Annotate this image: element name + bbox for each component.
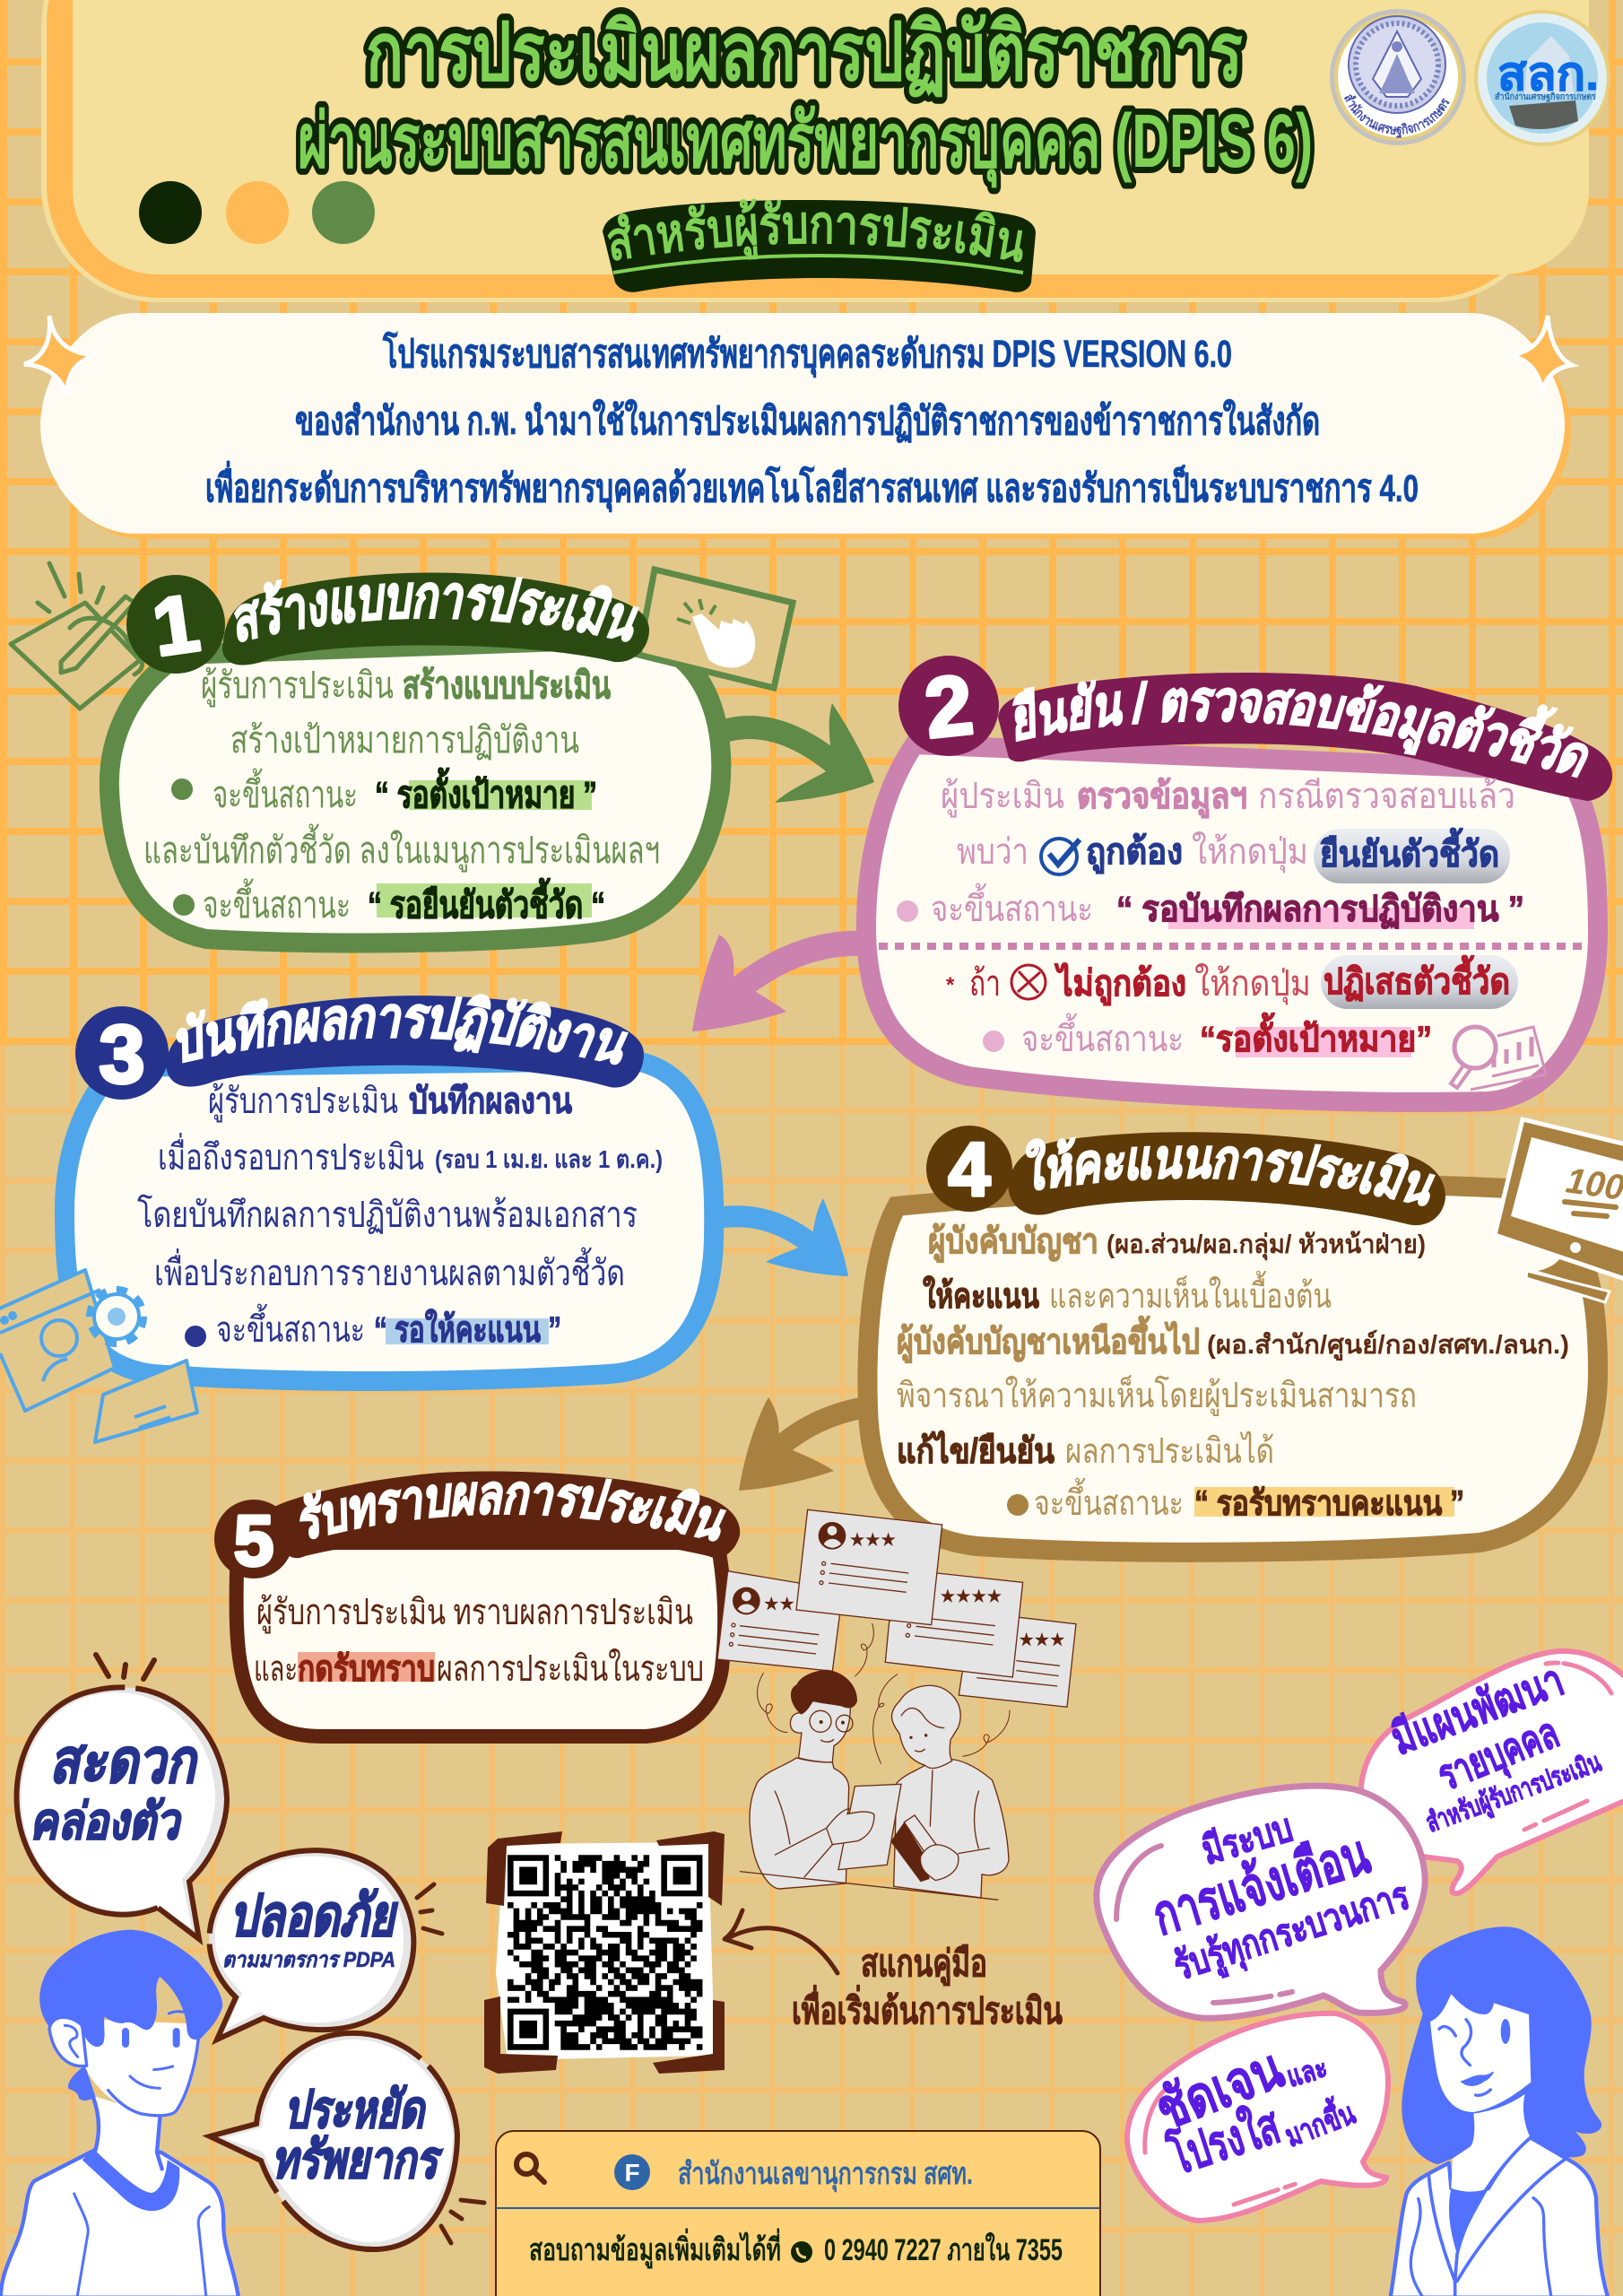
step 2 body text: incorrect branch — [946, 955, 1518, 1059]
contact prompt: สอบถามข้อมูลเพิ่มเติมได้ที่ — [529, 2228, 781, 2269]
icon: monitor with score 100 — [1495, 1119, 1623, 1302]
speech bubble: save resources — [210, 2033, 457, 2249]
panel: step 4 give score — [857, 1117, 1623, 1562]
speech bubble: clear and transparent: มากขึ้น — [1279, 2091, 1360, 2153]
step 5 title banner: 5 — [234, 1500, 273, 1580]
panel: step 2 verify indicator data — [856, 656, 1612, 1112]
card: three stars, far right: ★★★ — [1019, 1631, 1065, 1648]
step 4 body text: (ผอ.สำนัก/ศูนย์/กอง/สศท./ลนก.) — [1207, 1329, 1569, 1361]
step 5 body text — [254, 1593, 704, 1689]
speech bubble: convenient: คล่องตัว — [30, 1793, 182, 1849]
step 1 title banner: 1 — [148, 578, 204, 674]
card: four stars — [885, 1573, 1023, 1677]
step 2 body text: correct branch: ผู้ประเมิน — [941, 777, 1064, 817]
step 1 title banner: สร้างแบบการประเมิน — [234, 577, 639, 642]
person: man with glasses — [750, 1670, 857, 1889]
speech bubble: save resources: ประหยัด — [284, 2081, 426, 2139]
step 3 body text: ผู้รับการประเมิน — [208, 1082, 398, 1122]
QR caption: สแกนคู่มือ — [861, 1943, 987, 1987]
logo: office secretary building — [1474, 10, 1610, 146]
step 2 body text: incorrect branch: * — [946, 973, 955, 997]
icon: facebook: F — [624, 2159, 640, 2187]
step 3 body text: (รอบ 1 เม.ย. และ 1 ต.ค.) — [435, 1145, 663, 1173]
step 4 body text: แก้ไข/ยืนยัน — [897, 1431, 1055, 1471]
step 2 body text: incorrect branch: จะขึ้นสถานะ — [1021, 1013, 1184, 1059]
speech bubble: convenient: สะดวก — [49, 1727, 198, 1796]
icon: windows and gear — [0, 1270, 197, 1442]
card: two stars — [717, 1571, 843, 1671]
step 2 title banner: 2 — [921, 657, 977, 755]
speech bubble: notification system: การแจ้งเตือน — [1146, 1823, 1376, 1947]
panel: step 5 acknowledge result — [214, 1471, 741, 1744]
step 3 body text — [137, 1082, 663, 1350]
document held by man — [838, 1784, 901, 1870]
hand holding book — [920, 1845, 959, 1881]
step 2 body text: correct branch: จะขึ้นสถานะ — [931, 883, 1093, 929]
speech bubble: safe — [209, 1850, 413, 2039]
step 1 title banner — [126, 572, 649, 674]
step 3 body text: จะขึ้นสถานะ — [216, 1303, 365, 1350]
speech bubble: individual development plan: รายบุคคล — [1431, 1709, 1567, 1803]
step 2 body text: incorrect branch: ให้กดปุ่ม — [1194, 962, 1311, 1005]
step 2 body text: correct branch: พบว่า — [957, 832, 1028, 872]
QR caption: เพื่อเริ่มต้นการประเมิน — [792, 1985, 1063, 2031]
step 2 body text: correct branch: ถูกต้อง — [1086, 832, 1183, 874]
icon: magnifier over chart — [1451, 1027, 1546, 1090]
step 4 body text — [897, 1222, 1569, 1523]
button: reject indicator: ปฏิเสธตัวชี้วัด — [1324, 955, 1510, 1002]
step 3 body text: เมื่อถึงรอบการประเมิน — [158, 1133, 424, 1178]
intro text — [205, 330, 1419, 513]
step 3 body text: บันทึกผลงาน — [409, 1082, 572, 1121]
logo: office secretary building: สลก. — [1497, 48, 1599, 100]
QR caption — [792, 1943, 1063, 2031]
step 2 body text: correct branch — [897, 777, 1524, 929]
step 1 body text: จะขึ้นสถานะ — [213, 768, 358, 815]
step 1 body text: สร้างแบบประเมิน — [403, 665, 611, 706]
sparks: convenient bubble — [96, 1655, 154, 1679]
speech bubble: convenient — [17, 1687, 227, 1939]
step 2 body text: incorrect branch: ถ้า — [969, 964, 1001, 1004]
step 5 title banner: รับทราบผลการประเมิน — [299, 1478, 726, 1542]
icon: phone — [791, 2241, 812, 2263]
step 4 body text: (ผอ.ส่วน/ผอ.กลุ่ม/ หัวหน้าฝ่าย) — [1107, 1231, 1426, 1260]
title line 1: การประเมินผลการปฏิบัติราชการ — [366, 8, 1243, 98]
logo: office secretary building: สำนักงานเศรษฐกิจการเกษตร — [1495, 91, 1597, 102]
step 2 body text: incorrect branch: “รอตั้งเป้าหมาย” — [1200, 1013, 1432, 1059]
button: confirm indicator — [1314, 828, 1510, 883]
icon: search — [516, 2154, 544, 2182]
step 4 body text: จะขึ้นสถานะ — [1034, 1477, 1184, 1523]
arrow: pointing to QR code — [725, 1910, 838, 1973]
step 2 title banner: ยืนยัน / ตรวจสอบข้อมูลตัวชี้วัด — [1011, 680, 1589, 778]
icon: left sparkle — [24, 316, 97, 395]
icon: facebook — [614, 2154, 650, 2190]
speech bubble: individual development plan — [1361, 1651, 1623, 1893]
speech bubble: clear and transparent: โปรงใส — [1161, 2096, 1287, 2186]
step 1 body text — [143, 665, 660, 926]
logo: agricultural economics office seal — [1330, 9, 1466, 145]
speech bubble: notification system — [1097, 1786, 1425, 2018]
speech bubble: individual development plan: มีแผนพัฒนา — [1384, 1655, 1570, 1764]
card: three stars, front: ★★★ — [849, 1530, 896, 1548]
card: four stars: ★★★★ — [940, 1587, 1002, 1605]
step 3 title banner — [75, 994, 644, 1100]
step 5 title banner — [214, 1471, 741, 1580]
facebook page name: สำนักงานเลขานุการกรม สศท. — [678, 2157, 973, 2193]
icon: right sparkle — [1511, 316, 1572, 391]
arrow: step 4 to step 5 — [739, 1397, 861, 1491]
button: confirm indicator: ยืนยันตัวชี้วัด — [1320, 828, 1499, 874]
step 4 body text: ผู้บังคับบัญชา — [928, 1222, 1098, 1263]
icon: tablet with pointer hand — [638, 570, 793, 688]
icon: cross mark — [1011, 965, 1046, 999]
step 2 body text: correct branch: “ รอบันทึกผลการปฏิบัติงาน ” — [1116, 890, 1524, 929]
step 4 body text: ผลการประเมินได้ — [1065, 1431, 1274, 1471]
step 3 title banner: 3 — [99, 1009, 145, 1100]
icon: hand writing on paper — [11, 563, 143, 709]
speech bubble: safe: ตามมาตรการ PDPA — [222, 1948, 395, 1972]
step 3 body text: เพื่อประกอบการรายงานผลตามตัวชี้วัด — [154, 1247, 625, 1293]
step 2 body text: correct branch: ให้กดปุ่ม — [1192, 831, 1308, 874]
step 5 body text: และ — [254, 1649, 298, 1689]
logo: agricultural economics office seal: สำนักงานเศรษฐกิจการเกษตร — [1344, 94, 1449, 138]
book — [890, 1815, 936, 1882]
step 1 body text: สร้างเป้าหมายการปฏิบัติงาน — [230, 719, 579, 761]
step 3 body text: “ รอให้คะแนน ” — [374, 1309, 561, 1350]
decorative squiggles — [758, 1623, 1010, 1764]
panel: introduction — [40, 313, 1571, 539]
speech bubble: safe: ปลอดภัย — [230, 1883, 398, 1948]
button: reject indicator — [1321, 955, 1518, 1009]
phone number: 0 2940 7227 ภายใน 7355 — [824, 2231, 1063, 2267]
panel: step 1 create assessment form — [9, 561, 796, 952]
card: three stars, far right — [959, 1617, 1076, 1707]
step 4 title banner: 4 — [949, 1127, 991, 1212]
QR code with corner brackets — [484, 1831, 725, 2074]
illustration: woman — [1391, 1926, 1608, 2296]
step 1 body text: จะขึ้นสถานะ — [203, 878, 351, 926]
step 2 body text: incorrect branch: ไม่ถูกต้อง — [1054, 962, 1186, 1005]
speech bubble: clear and transparent: และ — [1283, 2051, 1331, 2093]
sparks: safe bubble — [417, 1884, 442, 1934]
step 4 title banner: ให้คะแนนการประเมิน — [1026, 1137, 1436, 1206]
hand holding document — [827, 1809, 874, 1845]
panel: contact box — [496, 2131, 1100, 2296]
step 2 body text: correct branch: กรณีตรวจสอบแล้ว — [1258, 777, 1515, 816]
step 1 body text: “ รอยืนยันตัวชี้วัด “ — [368, 878, 605, 926]
arrow: step 2 to step 3 — [692, 935, 861, 1031]
speech bubble: clear and transparent: ชัดเจน — [1148, 2038, 1291, 2142]
card: two stars: ★★ — [764, 1595, 794, 1613]
panel: step 3 record performance — [0, 994, 725, 1444]
panel: header banner — [41, 0, 1589, 302]
step 2 body text: correct branch: ตรวจข้อมูลฯ — [1077, 777, 1247, 818]
step 4 body text: ให้คะแนน — [923, 1275, 1039, 1316]
step 1 body text: ผู้รับการประเมิน — [201, 665, 394, 708]
subtitle badge: สำหรับผู้รับการประเมิน — [608, 199, 1022, 262]
card: three stars, front — [796, 1509, 942, 1625]
step 4 body text: ผู้บังคับบัญชาเหนือขึ้นไป — [897, 1316, 1200, 1363]
icon: check mark — [1041, 839, 1080, 874]
step 1 body text: “ รอตั้งเป้าหมาย ” — [375, 768, 597, 815]
step 3 title banner: บันทึกผลการปฏิบัติงาน — [176, 994, 629, 1065]
arrow: step 1 to step 2 — [725, 703, 874, 803]
speech bubble: clear and transparent — [1127, 2013, 1388, 2221]
step 4 body text: “ รอรับทราบคะแนน ” — [1194, 1484, 1464, 1523]
arrow: step 3 to step 4 — [717, 1198, 848, 1276]
illustration: man — [1, 1930, 239, 2296]
step 5 body text: กดรับทราบ — [298, 1649, 435, 1689]
speech bubble: notification system: รับรู้ทุกกระบวนการ — [1168, 1874, 1416, 1991]
illustration: two colleagues reviewing rating cards — [717, 1509, 1076, 1900]
speech bubble: notification system: มีระบบ — [1197, 1805, 1298, 1874]
sparks: save resources bubble — [441, 2200, 484, 2243]
step 1 body text: และบันทึกตัวชี้วัด ลงในเมนูการประเมินผลฯ — [143, 823, 660, 873]
step 5 body text: ผู้รับการประเมิน ทราบผลการประเมิน — [256, 1593, 693, 1633]
step 4 body text: พิจารณาให้ความเห็นโดยผู้ประเมินสามารถ — [897, 1374, 1417, 1416]
step 5 body text: ผลการประเมินในระบบ — [437, 1648, 704, 1689]
step 2 title banner — [898, 656, 1612, 801]
person: second colleague — [892, 1685, 1009, 1898]
step 4 body text: และความเห็นในเบื้องต้น — [1049, 1270, 1332, 1316]
speech bubble: save resources: ทรัพยากร — [272, 2131, 443, 2189]
decorative dots — [139, 181, 375, 244]
intro text: โปรแกรมระบบสารสนเทศทรัพยากรบุคคลระดับกรม DPIS VERSION 6.0 — [382, 330, 1232, 378]
step 3 body text: โดยบันทึกผลการปฏิบัติงานพร้อมเอกสาร — [137, 1195, 638, 1235]
